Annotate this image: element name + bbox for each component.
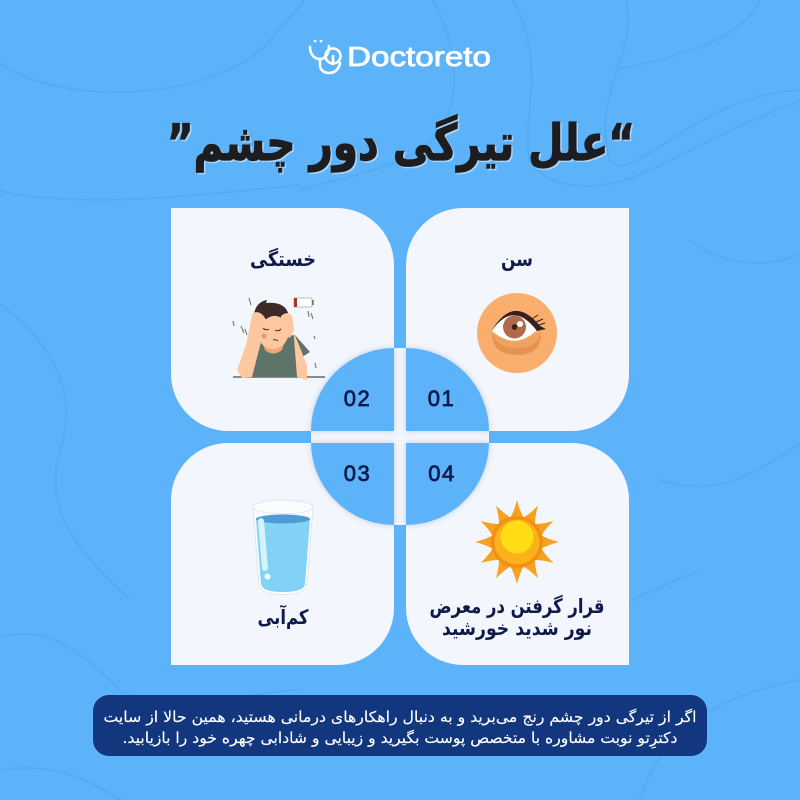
- panel: 03 dehydration: [171, 443, 394, 665]
- number 04: [406, 443, 489, 525]
- panel: 01 age: [406, 208, 629, 431]
- title: “علل تیرگی دور چشم”: [167, 114, 635, 173]
- icon: sun: [475, 500, 559, 584]
- number 01: 01: [428, 386, 455, 411]
- callout: bottom text: اگر از تیرگی دور چشم رنج می‌برید و به دنبال راهکارهای درمانی هستید، همین حالا از سایت: [104, 708, 696, 726]
- number 02: [311, 348, 394, 431]
- number 01: [406, 348, 489, 431]
- number 03: 03: [344, 461, 371, 486]
- heading: age: سن: [501, 247, 533, 271]
- icon: stethoscope: [310, 41, 340, 73]
- panel: 04 sun exposure: نور شدید خورشید: [442, 616, 592, 640]
- logo: Doctoreto: [310, 41, 491, 73]
- wordmark: Doctoreto: [347, 41, 491, 72]
- heading: fatigue: خستگی: [250, 247, 316, 271]
- icon: eye: [477, 293, 557, 373]
- callout: bottom text: [93, 695, 707, 756]
- title: “علل تیرگی دور چشم”: [168, 116, 636, 174]
- icon: glass of water: [253, 500, 313, 594]
- heading: sun exposure: قرار گرفتن در معرض: [430, 594, 604, 618]
- number 03: [311, 443, 394, 525]
- center numbered circle: [311, 348, 489, 525]
- heading: dehydration: کم‌آبی: [258, 604, 309, 629]
- number 04: 04: [428, 461, 456, 486]
- callout: bottom text: دکترِتو نوبت مشاوره با متخصص پوست بگیرید و زیبایی و شادابی چهره خود را بازیابید.: [122, 729, 678, 750]
- panel: 04 sun exposure: [406, 443, 629, 665]
- icon: tired man: [233, 298, 325, 380]
- panel: 02 fatigue: [171, 208, 394, 431]
- number 02: 02: [344, 386, 371, 411]
